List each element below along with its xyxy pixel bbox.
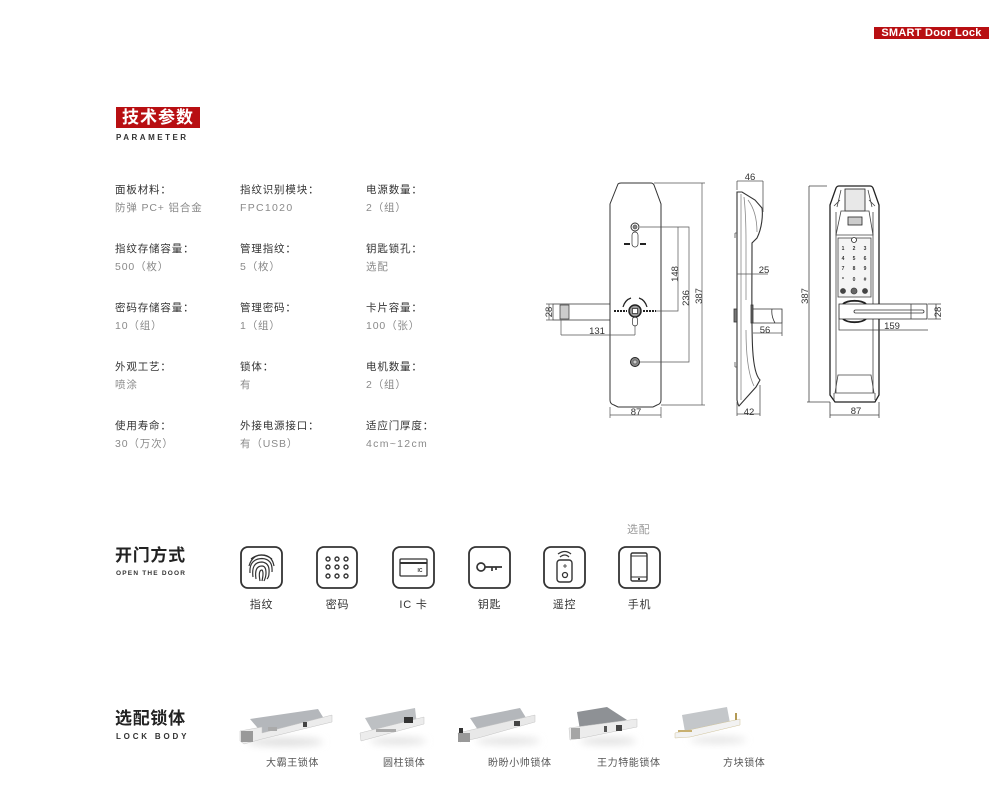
dimension labels: back view: 148 (670, 266, 681, 282)
subheading: LOCK BODY: LOCK BODY (116, 732, 189, 741)
dimension labels: front view: 87 (851, 406, 861, 417)
subheading: PARAMETER: PARAMETER (116, 133, 189, 142)
dimension labels: back view: 236 (681, 290, 692, 306)
parameter: 卡片容量: 卡片容量： (366, 302, 423, 314)
diagram: back view of lock (546, 183, 705, 418)
parameter: 电机数量 (366, 361, 423, 391)
dimension labels: front view: * (842, 277, 844, 283)
lock body: 方块锁体 (675, 707, 746, 744)
label: 圆柱锁体: 圆柱锁体 (383, 758, 425, 769)
dimension labels: back view: 87 (631, 407, 641, 418)
label: IC 卡: IC 卡 (399, 599, 428, 611)
lock body: 大霸王锁体 (240, 709, 332, 746)
dimension labels: front view: 0 (853, 277, 856, 283)
dimension labels: front view: 7 (842, 266, 845, 272)
dimension labels: front view: 387 (800, 288, 811, 304)
parameter: 指纹识别模块: 指纹识别模块： (240, 184, 319, 196)
parameter: 指纹识别模块: FPC1020 (240, 202, 293, 214)
icon: remote control (544, 547, 585, 588)
parameter: 指纹存储容量: 指纹存储容量： (115, 243, 194, 255)
dimension labels: side view (744, 172, 770, 418)
parameter: 钥匙锁孔: 钥匙锁孔： (366, 243, 423, 255)
label: 遥控: 遥控 (553, 599, 576, 611)
dimension labels: front view: 2 (853, 246, 856, 252)
parameter: 指纹存储容量 (115, 243, 194, 273)
badge: SMART Door Lock: SMART Door Lock (881, 27, 982, 39)
dimension labels: side view: 46 (745, 172, 755, 183)
parameter: 适应门厚度: 适应门厚度： (366, 420, 434, 432)
label: 盼盼小帅锁体: 盼盼小帅锁体 (488, 758, 552, 769)
parameter: 管理密码 (240, 302, 297, 332)
lock body: 盼盼小帅锁体 (458, 708, 540, 744)
icon: key (469, 547, 510, 588)
dimension labels: side view: 25 (759, 265, 769, 276)
label: 方块锁体: 方块锁体 (723, 758, 765, 769)
icon: keypad (317, 547, 357, 588)
dimension labels: front view: # (864, 277, 867, 283)
parameter: 面板材料: 面板材料： (115, 184, 172, 196)
parameter: 锁体 (240, 361, 274, 391)
parameter: 钥匙锁孔: 选配 (366, 261, 389, 273)
parameter: 锁体: 锁体： (240, 361, 274, 373)
parameter: 使用寿命: 使用寿命： (115, 420, 172, 432)
parameter: 指纹存储容量: 500（枚） (115, 261, 169, 273)
parameter: 外接电源接口 (240, 420, 319, 450)
parameter: 密码存储容量: 10（组） (115, 320, 162, 332)
dimension labels: back view: 387 (694, 288, 705, 304)
parameter: 外观工艺 (115, 361, 172, 391)
label: 大霸王锁体: 大霸王锁体 (266, 758, 319, 769)
parameter: 外观工艺: 喷涂 (115, 379, 138, 391)
parameter: 适应门厚度: 4cm~12cm (366, 438, 428, 450)
label: 密码: 密码 (326, 599, 349, 611)
parameter: 外观工艺: 外观工艺： (115, 361, 172, 373)
dimension labels: front view: 6 (864, 256, 867, 262)
dimension labels: back view (544, 266, 705, 418)
parameter: 卡片容量 (366, 302, 423, 332)
dimension labels: side view: 42 (744, 407, 754, 418)
parameter: 电机数量: 电机数量： (366, 361, 423, 373)
parameter: 指纹识别模块 (240, 184, 319, 214)
lock body: 圆柱锁体 (360, 708, 426, 744)
label: 王力特能锁体: 王力特能锁体 (597, 758, 661, 769)
heading: 选配锁体: 选配锁体 (115, 709, 186, 728)
parameter: 管理密码: 1（组） (240, 320, 281, 332)
parameter: 电源数量: 2（组） (366, 202, 407, 214)
dimension labels: front view: 159 (884, 321, 900, 332)
lock body: 王力特能锁体 (569, 707, 637, 744)
label: 手机: 手机 (628, 599, 651, 611)
parameter: 面板材料 (115, 184, 203, 214)
heading: 开门方式: 开门方式 (115, 546, 186, 565)
dimension labels: back view: 131 (589, 326, 605, 337)
parameter: 电源数量: 电源数量： (366, 184, 423, 196)
parameter: 外接电源接口: 外接电源接口： (240, 420, 319, 432)
parameter: 密码存储容量: 密码存储容量： (115, 302, 194, 314)
icon: fingerprint (241, 547, 282, 588)
parameter: 外接电源接口: 有（USB） (240, 438, 298, 450)
icon: IC card: IC (418, 568, 423, 574)
label: 指纹: 指纹 (250, 599, 273, 611)
parameter: 管理密码: 管理密码： (240, 302, 297, 314)
parameter: 使用寿命: 30（万次） (115, 438, 174, 450)
dimension labels: front view: 4 (842, 256, 845, 262)
parameter: 卡片容量: 100（张） (366, 320, 420, 332)
dimension labels: front view: 9 (864, 266, 867, 272)
dimension labels: front view (800, 246, 944, 417)
dimension labels: front view: 5 (853, 256, 856, 262)
dimension labels: back view: 28 (544, 307, 555, 317)
parameter: 管理指纹 (240, 243, 297, 273)
dimension labels: front view: 3 (864, 246, 867, 252)
parameter: 密码存储容量 (115, 302, 194, 332)
parameter: 管理指纹: 管理指纹： (240, 243, 297, 255)
parameter: 适应门厚度 (366, 420, 434, 450)
icon: mobile phone (619, 547, 660, 588)
parameter: 使用寿命 (115, 420, 174, 450)
parameter: 面板材料: 防弹 PC+ 铝合金 (115, 202, 203, 214)
parameter: 管理指纹: 5（枚） (240, 261, 281, 273)
heading: 技术参数: 技术参数 (122, 108, 194, 127)
dimension labels: front view: 8 (853, 266, 856, 272)
parameter: 钥匙锁孔 (366, 243, 423, 273)
note: 选配: 选配 (627, 524, 650, 536)
parameter: 锁体: 有 (240, 379, 251, 391)
dimension labels: front view: 28 (933, 307, 944, 317)
parameter: 电源数量 (366, 184, 423, 214)
diagram: side view of lock (734, 181, 782, 416)
diagram: front view of lock (807, 186, 941, 418)
dimension labels: side view: 56 (760, 325, 770, 336)
parameter: 电机数量: 2（组） (366, 379, 407, 391)
dimension labels: front view: 1 (842, 246, 845, 252)
subheading: OPEN THE DOOR: OPEN THE DOOR (116, 570, 186, 577)
icon: IC card (393, 547, 434, 588)
label: 钥匙: 钥匙 (478, 599, 501, 611)
